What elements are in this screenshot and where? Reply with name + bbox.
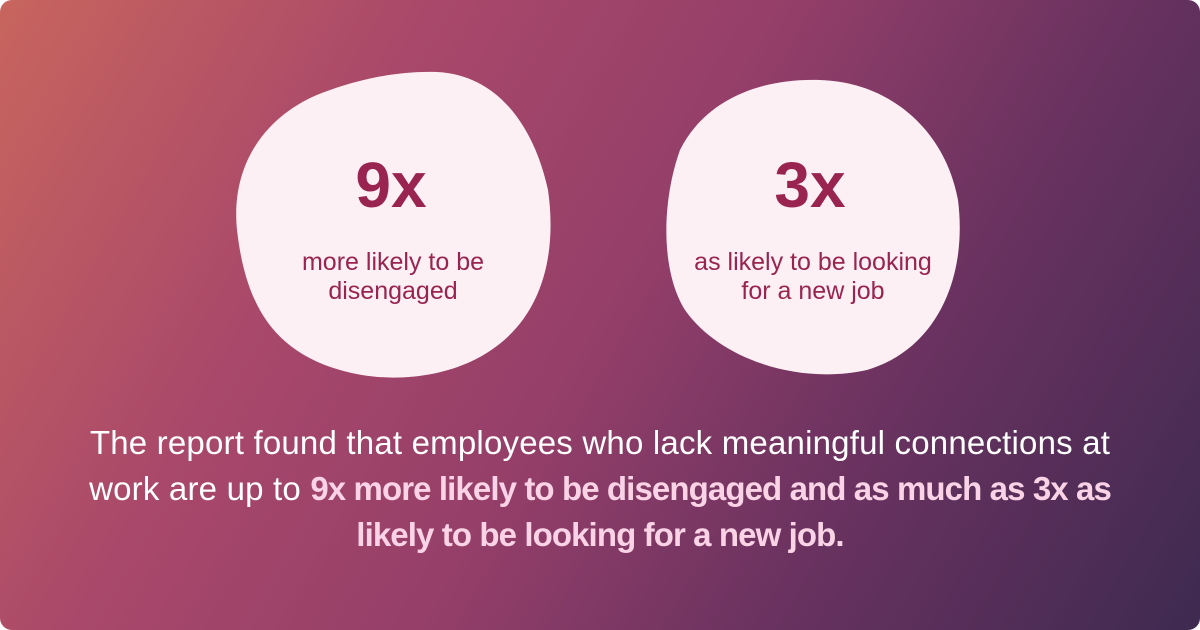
blob: 9x: disengaged: [328, 277, 458, 305]
blob: 3x: [666, 80, 960, 374]
summary text: The report found that employees who lack meaningful connections at: [90, 424, 1110, 461]
blob: 9x: [236, 72, 551, 378]
blob: 9x: 9x: [355, 149, 427, 221]
blob: 3x: as likely to be looking: [694, 248, 932, 276]
blob: 3x: for a new job: [741, 277, 885, 305]
blob: 9x: more likely to be: [302, 248, 484, 276]
summary text: work are up to 9x more likely to be disengaged and as much as 3x as: [89, 470, 1111, 507]
summary text: likely to be looking for a new job.: [356, 516, 844, 553]
summary text: [89, 424, 1111, 553]
blob: 3x: 3x: [774, 149, 846, 221]
